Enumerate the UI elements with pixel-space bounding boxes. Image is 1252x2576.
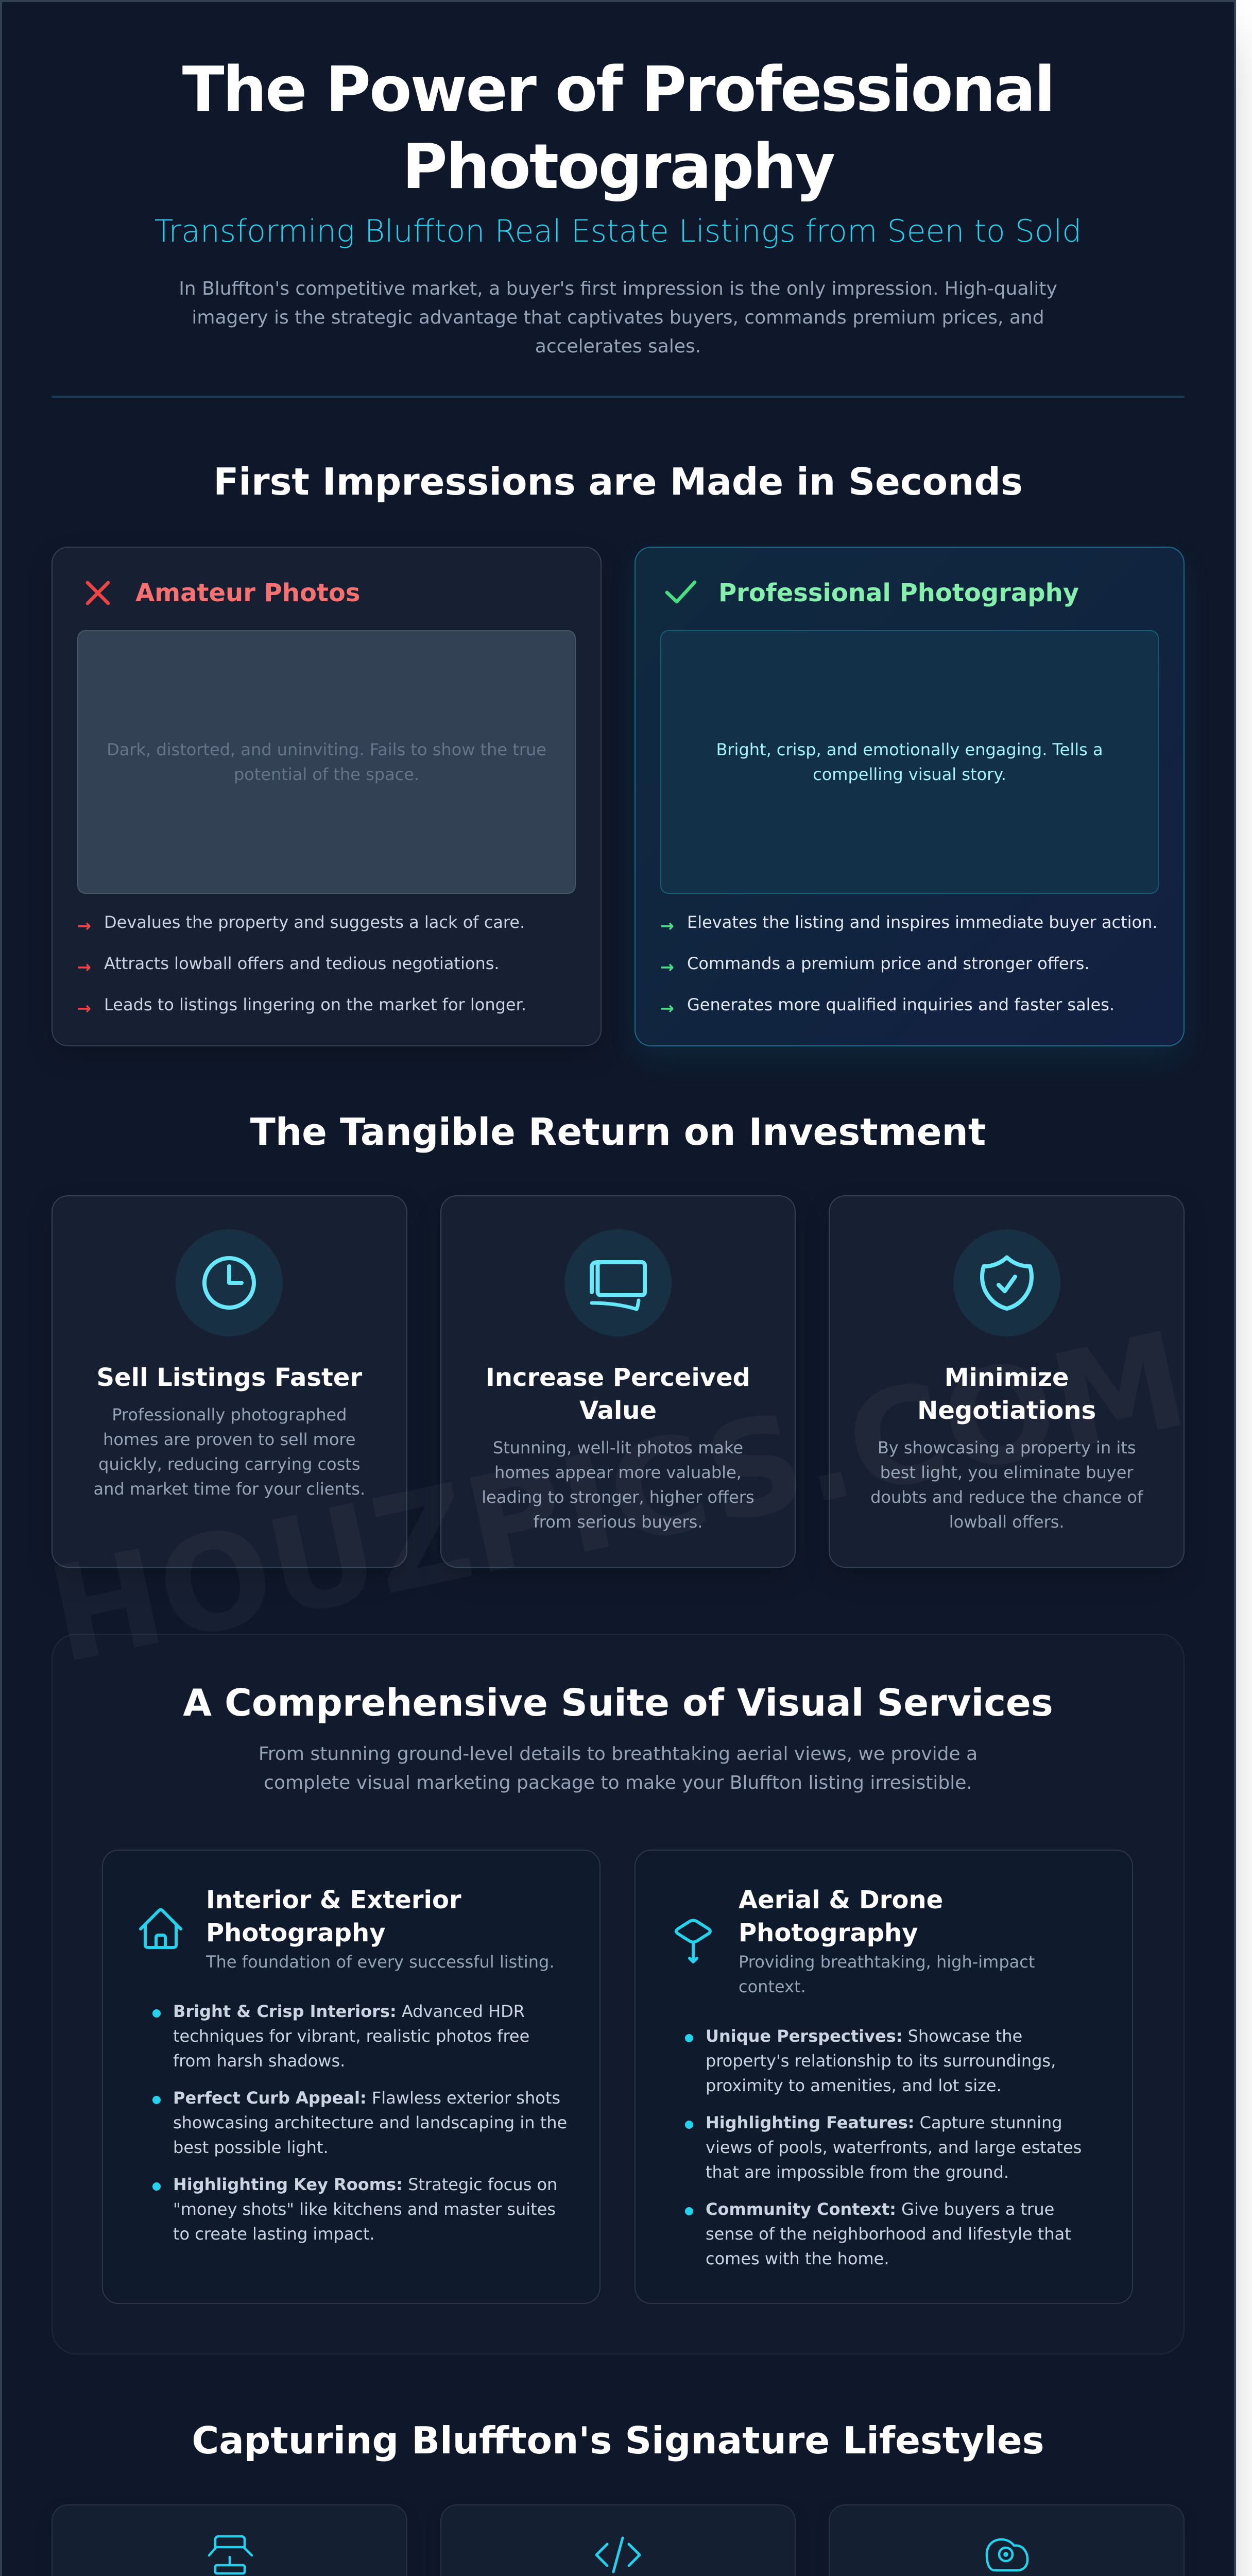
section: first impressions <box>52 460 1185 1055</box>
placeholder caption: potential of the space. <box>234 765 419 784</box>
card title: Negotiations <box>917 1396 1096 1425</box>
feature 1: from harsh shadows. <box>173 2051 345 2071</box>
placeholder caption <box>716 740 1103 784</box>
feature 3: Community Context: Give buyers a true <box>706 2199 1054 2219</box>
bullet dot 3 <box>152 2182 161 2191</box>
card text <box>94 1405 365 1499</box>
heading: professional photography: Professional Photography <box>718 579 1079 607</box>
feature 1: Bright & Crisp Interiors: Advanced HDR <box>173 2002 525 2021</box>
card title: Minimize <box>945 1363 1069 1392</box>
arrow: red 1: → <box>77 916 91 936</box>
card: visual storytelling <box>829 2504 1185 2576</box>
feature 2 <box>706 2110 1082 2184</box>
service tagline <box>739 1950 1035 1999</box>
service tagline: The foundation of every successful listing. <box>206 1952 555 1972</box>
arrow: green 2: → <box>660 957 674 977</box>
services intro <box>259 1743 977 1793</box>
service title: Aerial & Drone <box>739 1886 943 1914</box>
card text: homes appear more valuable, <box>494 1463 742 1482</box>
arrow: green 3: → <box>660 998 674 1018</box>
benefit 3: Generates more qualified inquiries and faster sales. <box>687 995 1114 1014</box>
intro text: accelerates sales. <box>535 336 701 357</box>
services intro: From stunning ground-level details to breathtaking aerial views, we provide a <box>259 1743 977 1765</box>
intro text: In Bluffton's competitive market, a buyer's first impression is the only impression. High-quality <box>179 278 1057 299</box>
service title: Interior & Exterior <box>206 1886 461 1914</box>
icon: camera cloud <box>982 2530 1032 2576</box>
icon: stacked photos <box>564 1229 672 1336</box>
panel: professional photography <box>634 547 1185 1046</box>
icon: green check <box>665 580 696 604</box>
card text: and market time for your clients. <box>94 1479 365 1499</box>
intro text <box>179 278 1057 357</box>
card: sell faster <box>52 1195 407 1568</box>
feature 1: property's relationship to its surroundings, <box>706 2051 1056 2071</box>
bullet dot 3 <box>685 2207 693 2215</box>
photo placeholder: amateur <box>77 630 576 894</box>
feature 1: Unique Perspectives: Showcase the <box>706 2026 1022 2046</box>
card title: Value <box>579 1396 657 1425</box>
placeholder caption <box>107 740 546 784</box>
feature 2: showcasing architecture and landscaping in the <box>173 2113 567 2132</box>
header <box>52 54 1185 398</box>
drawback 2: Attracts lowball offers and tedious negotiations. <box>104 954 500 973</box>
card text: from serious buyers. <box>534 1512 702 1532</box>
card text: quickly, reducing carrying costs <box>98 1454 361 1474</box>
icon: shield <box>953 1229 1060 1336</box>
list: professional benefits <box>660 912 1158 1018</box>
feature 2: best possible light. <box>173 2138 329 2157</box>
card text <box>870 1438 1143 1532</box>
heading: return on investment: The Tangible Return on Investment <box>250 1110 986 1154</box>
card: minimize negotiations <box>829 1195 1185 1568</box>
panel: visual services <box>52 1634 1185 2354</box>
section: return on investment <box>52 1110 1185 1568</box>
drawback 1: Devalues the property and suggests a lack of care. <box>104 912 525 932</box>
benefit 1: Elevates the listing and inspires immediate buyer action. <box>687 912 1158 932</box>
card text: leading to stronger, higher offers <box>482 1487 754 1507</box>
title: Photography <box>402 131 834 203</box>
card title: Increase Perceived <box>486 1363 750 1392</box>
service title <box>206 1886 461 1947</box>
list: amateur drawbacks <box>77 912 526 1018</box>
card text: Stunning, well-lit photos make <box>493 1438 743 1458</box>
intro text: imagery is the strategic advantage that captivates buyers, commands premium prices, and <box>192 307 1044 328</box>
feature 3: comes with the home. <box>706 2249 889 2268</box>
photo placeholder: professional <box>660 630 1159 894</box>
arrow: red 2: → <box>77 957 91 977</box>
panel: interior and exterior <box>102 1850 601 2304</box>
card: perceived value <box>440 1195 796 1568</box>
feature 1: proximity to amenities, and lot size. <box>706 2076 1002 2095</box>
feature 3 <box>706 2197 1071 2271</box>
service tagline: Providing breathtaking, high-impact <box>739 1952 1035 1972</box>
placeholder caption: compelling visual story. <box>813 765 1006 784</box>
watermark: HOUZPICS.COM <box>37 1303 1199 1693</box>
feature 3: "money shots" like kitchens and master suites <box>173 2199 556 2219</box>
feature 2: views of pools, waterfronts, and large estates <box>706 2138 1082 2157</box>
title: The Power of Professional <box>182 54 1054 126</box>
arrow: green 1: → <box>660 916 674 936</box>
icon: red cross <box>85 581 110 605</box>
icon: house <box>139 1908 182 1949</box>
card text: homes are proven to sell more <box>103 1430 356 1449</box>
card title: Sell Listings Faster <box>96 1363 362 1392</box>
card text: doubts and reduce the chance of <box>870 1487 1143 1507</box>
feature 2: Perfect Curb Appeal: Flawless exterior shots <box>173 2088 560 2108</box>
feature 3: sense of the neighborhood and lifestyle that <box>706 2224 1071 2244</box>
card title <box>486 1363 750 1425</box>
bullet dot 2 <box>152 2096 161 2104</box>
placeholder caption: Bright, crisp, and emotionally engaging. Tells a <box>716 740 1103 759</box>
services intro: complete visual marketing package to make your Bluffton listing irresistible. <box>264 1772 972 1793</box>
card text: best light, you eliminate buyer <box>880 1463 1134 1482</box>
card: builders and designers <box>440 2504 796 2576</box>
service title <box>739 1884 943 1950</box>
icon: clock <box>176 1229 283 1336</box>
heading: amateur photos: Amateur Photos <box>135 579 360 607</box>
feature 1 <box>706 2024 1056 2098</box>
feature 2 <box>173 2086 567 2160</box>
icon: porch <box>204 2530 254 2576</box>
drawback 3: Leads to listings lingering on the market for longer. <box>104 995 526 1014</box>
card text: lowball offers. <box>949 1512 1065 1532</box>
section: signature lifestyles <box>52 2420 1185 2576</box>
placeholder caption: Dark, distorted, and uninviting. Fails to show the true <box>107 740 546 759</box>
icon: drone <box>668 1917 718 1966</box>
title <box>182 54 1054 203</box>
card text <box>482 1438 754 1532</box>
card text: Professionally photographed <box>112 1405 347 1425</box>
feature 3 <box>173 2172 557 2246</box>
panel: aerial and drone <box>634 1850 1133 2304</box>
feature 3: Highlighting Key Rooms: Strategic focus on <box>173 2175 557 2194</box>
service tagline: context. <box>739 1977 806 1996</box>
card: lowcountry architecture <box>52 2504 407 2576</box>
bullet dot 1 <box>152 2009 161 2018</box>
icon: code brackets <box>593 2530 643 2576</box>
service title: Photography <box>739 1919 918 1947</box>
heading: visual services: A Comprehensive Suite of Visual Services <box>183 1681 1053 1724</box>
bullet dot 2 <box>685 2121 693 2129</box>
feature 2: Highlighting Features: Capture stunning <box>706 2113 1062 2132</box>
feature 3: to create lasting impact. <box>173 2224 375 2244</box>
feature 2: that are impossible from the ground. <box>706 2162 1009 2182</box>
arrow: red 3: → <box>77 998 91 1018</box>
card title <box>917 1363 1096 1425</box>
heading: signature lifestyles: Capturing Bluffton's Signature Lifestyles <box>192 2419 1044 2462</box>
subtitle: Transforming Bluffton Real Estate Listings from Seen to Sold <box>155 213 1082 249</box>
benefit 2: Commands a premium price and stronger offers. <box>687 954 1090 973</box>
card text: By showcasing a property in its <box>878 1438 1136 1458</box>
feature 1: techniques for vibrant, realistic photos free <box>173 2026 529 2046</box>
panel: amateur photos <box>52 547 602 1046</box>
bullet dot 1 <box>685 2034 693 2042</box>
feature 1 <box>173 2002 529 2071</box>
heading: first impressions: First Impressions are Made in Seconds <box>213 460 1023 503</box>
service title: Photography <box>206 1919 385 1947</box>
